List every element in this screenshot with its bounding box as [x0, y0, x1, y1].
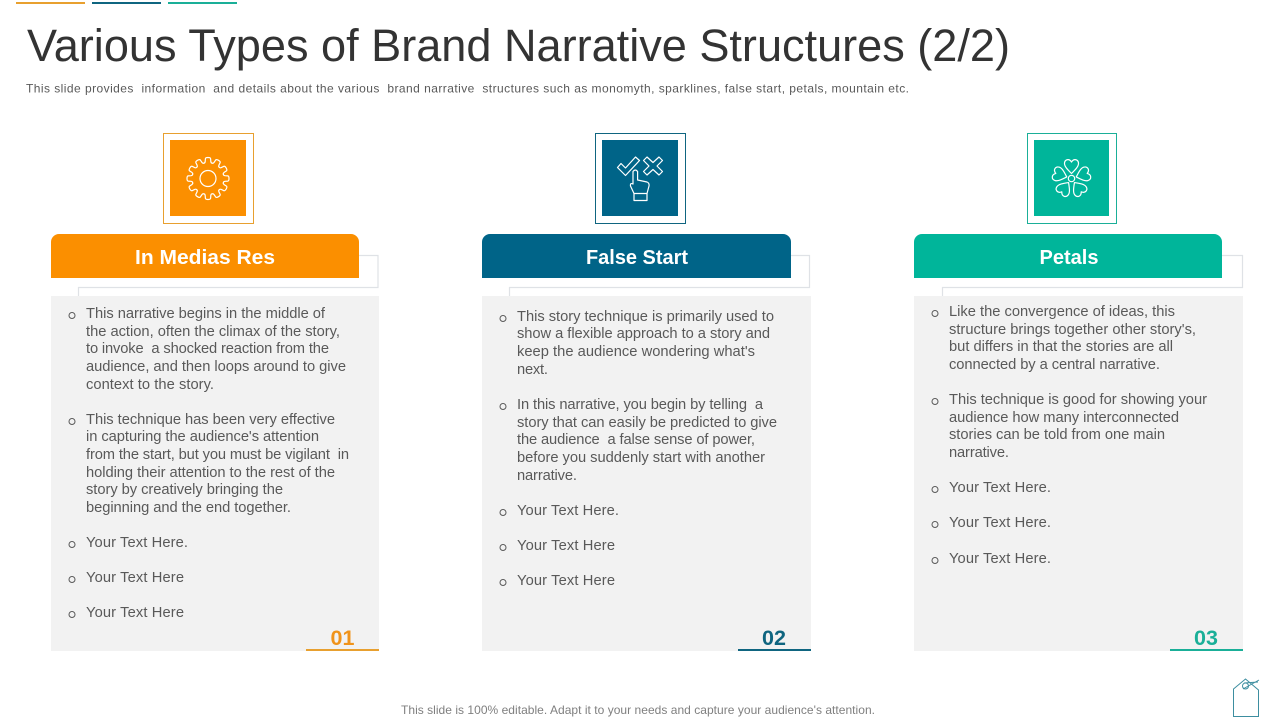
text block: Petals bullets [932, 304, 1207, 567]
text block: Petals bullets: structure brings together other story's, [949, 322, 1196, 338]
text block: False Start bullets: next. [517, 362, 548, 378]
text block: In Medias Res bullets [69, 306, 349, 621]
header: Petals [914, 234, 1222, 278]
text block: In Medias Res bullets: Your Text Here [86, 605, 184, 621]
text block: Petals bullets: Your Text Here. [949, 480, 1051, 496]
text block: Petals bullets: This technique is good for showing your [949, 392, 1207, 408]
footer note: This slide is 100% editable. Adapt it to your needs and capture your audience's attention. [401, 703, 875, 717]
text block: In Medias Res bullets: in capturing the audience's attention [86, 429, 319, 445]
text block: In Medias Res bullets: from the start, but you must be vigilant in [86, 447, 349, 463]
text block: Petals bullets: audience how many interconnected [949, 410, 1179, 426]
text block: False Start bullets: keep the audience wondering what's [517, 344, 755, 360]
panel: In Medias Res [51, 133, 379, 651]
text block: In Medias Res bullets: beginning and the end together. [86, 500, 291, 516]
header: In Medias Res: In Medias Res [135, 246, 275, 269]
header: Petals: Petals [1040, 246, 1098, 269]
header: In Medias Res [51, 234, 359, 278]
text block: In Medias Res bullets: context to the story. [86, 377, 214, 393]
text block: Petals bullets: but differs in that the stories are all [949, 339, 1173, 355]
text block: In Medias Res bullets: holding their attention to the rest of the [86, 465, 335, 481]
number: 03 [1170, 626, 1243, 651]
text block: False Start bullets: In this narrative, you begin by telling a [517, 397, 764, 413]
text block: False Start bullets: story that can easily be predicted to give [517, 415, 777, 431]
text block: In Medias Res bullets: to invoke a shocked reaction from the [86, 341, 329, 357]
panel: False Start [482, 133, 811, 651]
text block: In Medias Res bullets: This narrative begins in the middle of [86, 306, 326, 322]
text block: False Start bullets: before you suddenly start with another [517, 450, 765, 466]
text block: In Medias Res bullets: Your Text Here. [86, 535, 188, 551]
text block: False Start bullets [500, 309, 777, 589]
text block: Petals bullets: Your Text Here. [949, 551, 1051, 567]
text block: False Start bullets: Your Text Here [517, 538, 615, 554]
header: False Start: False Start [586, 246, 688, 269]
icon: price tag logo [1234, 679, 1259, 716]
icon: heart flower [1027, 133, 1117, 224]
text block: False Start bullets: narrative. [517, 468, 577, 484]
text block: In Medias Res bullets: the action, often the climax of the story, [86, 324, 340, 340]
subtitle: This slide provides information and details about the various brand narrative structures such as monomyth, sparklines, false start, petals, mountain etc. [26, 82, 909, 96]
title: Various Types of Brand Narrative Structures (2/2) [27, 20, 1010, 71]
number: 01: 01 [331, 626, 354, 650]
text block: In Medias Res bullets: story by creatively bringing the [86, 482, 283, 498]
text block: False Start bullets: Your Text Here [517, 573, 615, 589]
text block: In Medias Res bullets: This technique has been very effective [86, 412, 335, 428]
text block: False Start bullets: the audience a false sense of power, [517, 432, 755, 448]
number: 01 [306, 626, 379, 651]
text block: In Medias Res bullets: Your Text Here [86, 570, 184, 586]
text block: Petals bullets: Like the convergence of ideas, this [949, 304, 1175, 320]
header: False Start [482, 234, 791, 278]
number: 03: 03 [1194, 626, 1218, 650]
text block: False Start bullets: show a flexible approach to a story and [517, 326, 770, 342]
text block: In Medias Res bullets: audience, and then loops around to give [86, 359, 346, 375]
icon: check, cross and pointing hand [595, 133, 686, 224]
text block: Petals bullets: narrative. [949, 445, 1009, 461]
number: 02 [738, 626, 811, 651]
text block: False Start bullets: Your Text Here. [517, 503, 619, 519]
text block: Petals bullets: Your Text Here. [949, 515, 1051, 531]
panel: Petals [914, 133, 1243, 651]
icon: gear [163, 133, 254, 224]
number: 02: 02 [762, 626, 786, 650]
text block: False Start bullets: This story technique is primarily used to [517, 309, 774, 325]
text block: Petals bullets: connected by a central narrative. [949, 357, 1160, 373]
text block: Petals bullets: stories can be told from one main [949, 427, 1165, 443]
